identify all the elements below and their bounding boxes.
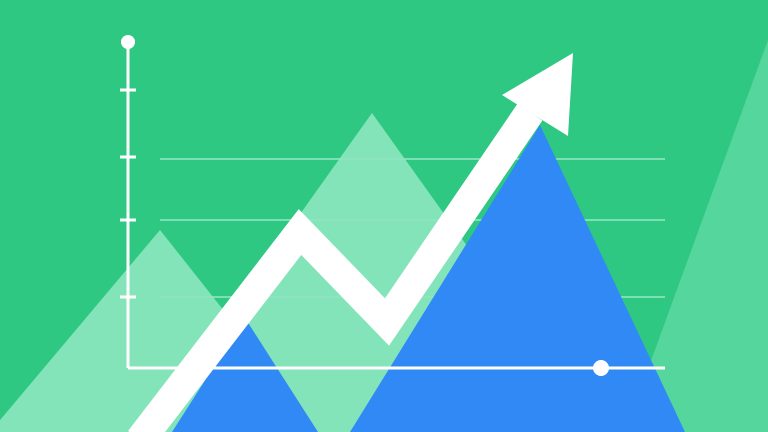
blue triangle: large <box>350 125 685 432</box>
background triangle: left <box>0 230 320 432</box>
axes <box>120 35 665 376</box>
gridlines <box>160 159 665 297</box>
background triangle: right <box>625 40 768 432</box>
blue triangle: small <box>172 318 318 432</box>
background triangle: middle <box>145 113 600 432</box>
trend arrow <box>140 53 573 432</box>
